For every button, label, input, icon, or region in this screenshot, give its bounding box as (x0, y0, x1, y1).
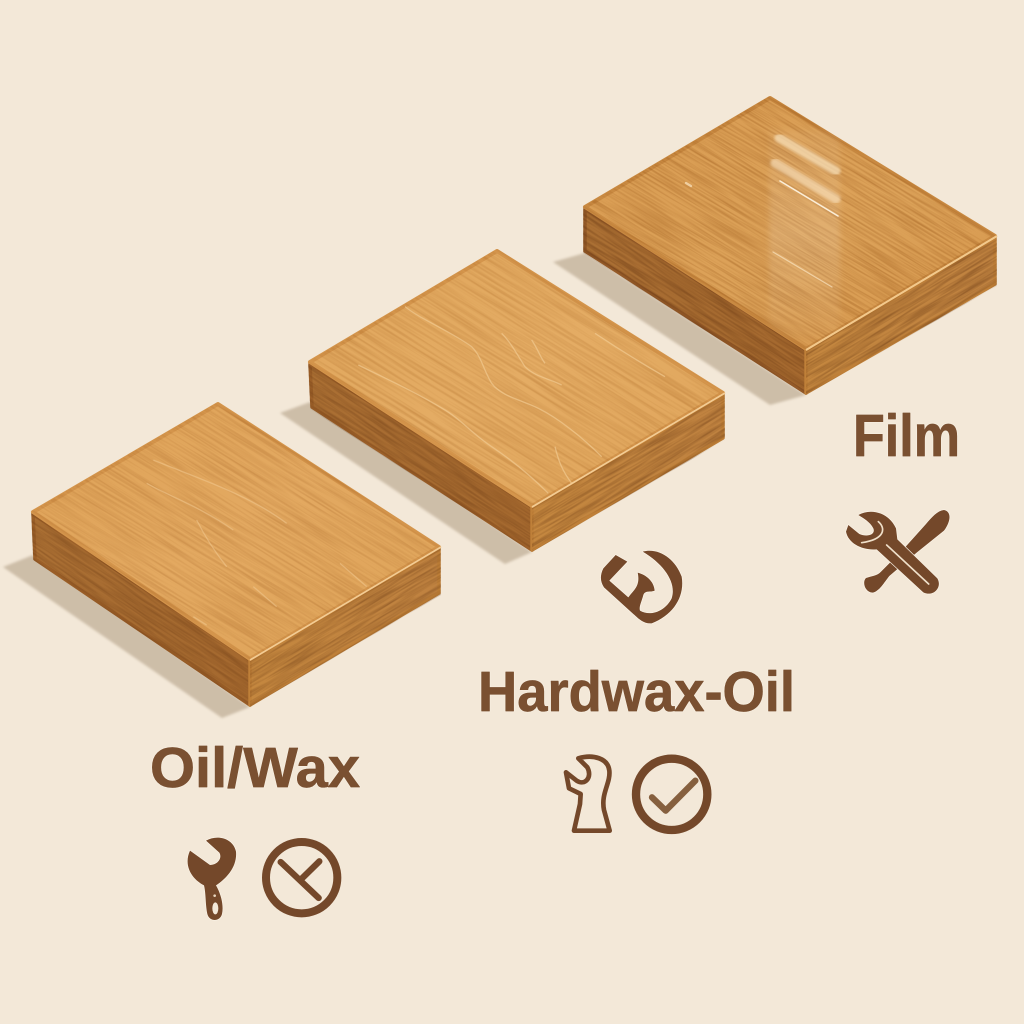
icon: hook-shaped wrench (hardwax-oil) (601, 551, 682, 623)
top face: film (582, 96, 998, 351)
wrench (846, 512, 939, 594)
icon: solid wrench (oil/wax) (188, 838, 236, 920)
top face: hardwax-oil (308, 249, 726, 508)
label: Film: Film (853, 403, 960, 469)
icon: crossed wrench and screwdriver (film) (846, 510, 950, 594)
top face: oil/wax (30, 402, 442, 661)
left side face: hardwax-oil (308, 363, 534, 552)
gloss reflection column (769, 130, 840, 340)
panel: oil/wax wood block (3, 402, 442, 718)
cast shadow: oil/wax block (3, 555, 250, 718)
panel: hardwax-oil wood block (280, 249, 726, 564)
wavy grain lines (358, 307, 665, 493)
icon: outlined wrench (hardwax-oil) (566, 757, 610, 831)
icon: circle with check mark (hardwax-oil) (636, 759, 707, 830)
label: Oil/Wax: Oil/Wax (150, 736, 360, 800)
screwdriver (864, 510, 950, 593)
right side face: oil/wax (248, 548, 441, 707)
cast shadow: hardwax-oil block (280, 402, 532, 564)
left side face: oil/wax (31, 512, 252, 707)
gloss streaks (686, 138, 838, 287)
cast shadow: film block (553, 253, 806, 405)
label: Hardwax-Oil: Hardwax-Oil (478, 660, 795, 724)
right side face: film (804, 237, 997, 395)
icon: circle with crossed lines (oil/wax) (266, 842, 337, 913)
panel: film wood block (554, 96, 998, 406)
left side face: film (583, 208, 808, 395)
right side face: hardwax-oil (530, 394, 725, 552)
